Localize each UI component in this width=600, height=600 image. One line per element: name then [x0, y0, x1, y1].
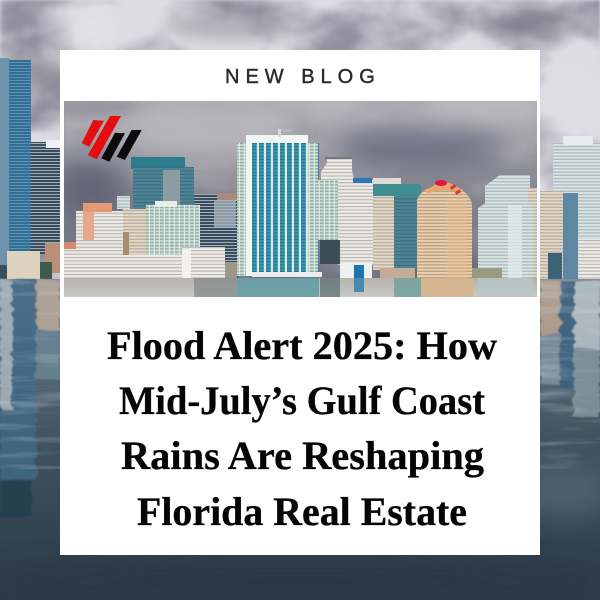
headline line 4: Florida Real Estate — [137, 489, 467, 534]
teal and cream tower — [373, 178, 421, 280]
background: right skyline — [540, 136, 600, 281]
background: cloudy sky — [0, 0, 600, 290]
headline — [107, 323, 497, 534]
teal rear building — [131, 157, 194, 209]
main teal tower — [237, 129, 322, 277]
white card — [60, 50, 540, 555]
headline line 3: Rains Are Reshaping — [121, 433, 484, 478]
peach and white tower — [64, 203, 123, 250]
peach domed tower — [417, 180, 472, 278]
photo sky — [64, 101, 537, 278]
small rear tower — [117, 196, 130, 209]
logo: red and black slashes — [82, 116, 142, 162]
headline line 1: Flood Alert 2025: How — [107, 323, 497, 368]
cream and green mid-rise — [123, 201, 200, 256]
background: flood water with reflections — [0, 279, 600, 600]
blue and white low block — [340, 263, 372, 278]
green and white tower — [318, 178, 374, 265]
background: left skyline — [0, 58, 60, 281]
headline line 2: Mid-July’s Gulf Coast — [119, 378, 486, 423]
white tower cluster — [472, 175, 537, 280]
low-rise row — [64, 247, 237, 280]
photo: flooded city skyline — [40, 99, 560, 297]
dark glass tower — [194, 193, 238, 278]
white domed tower — [321, 157, 354, 180]
label: new blog: NEW BLOG — [225, 66, 381, 88]
photo flood water — [64, 278, 537, 297]
